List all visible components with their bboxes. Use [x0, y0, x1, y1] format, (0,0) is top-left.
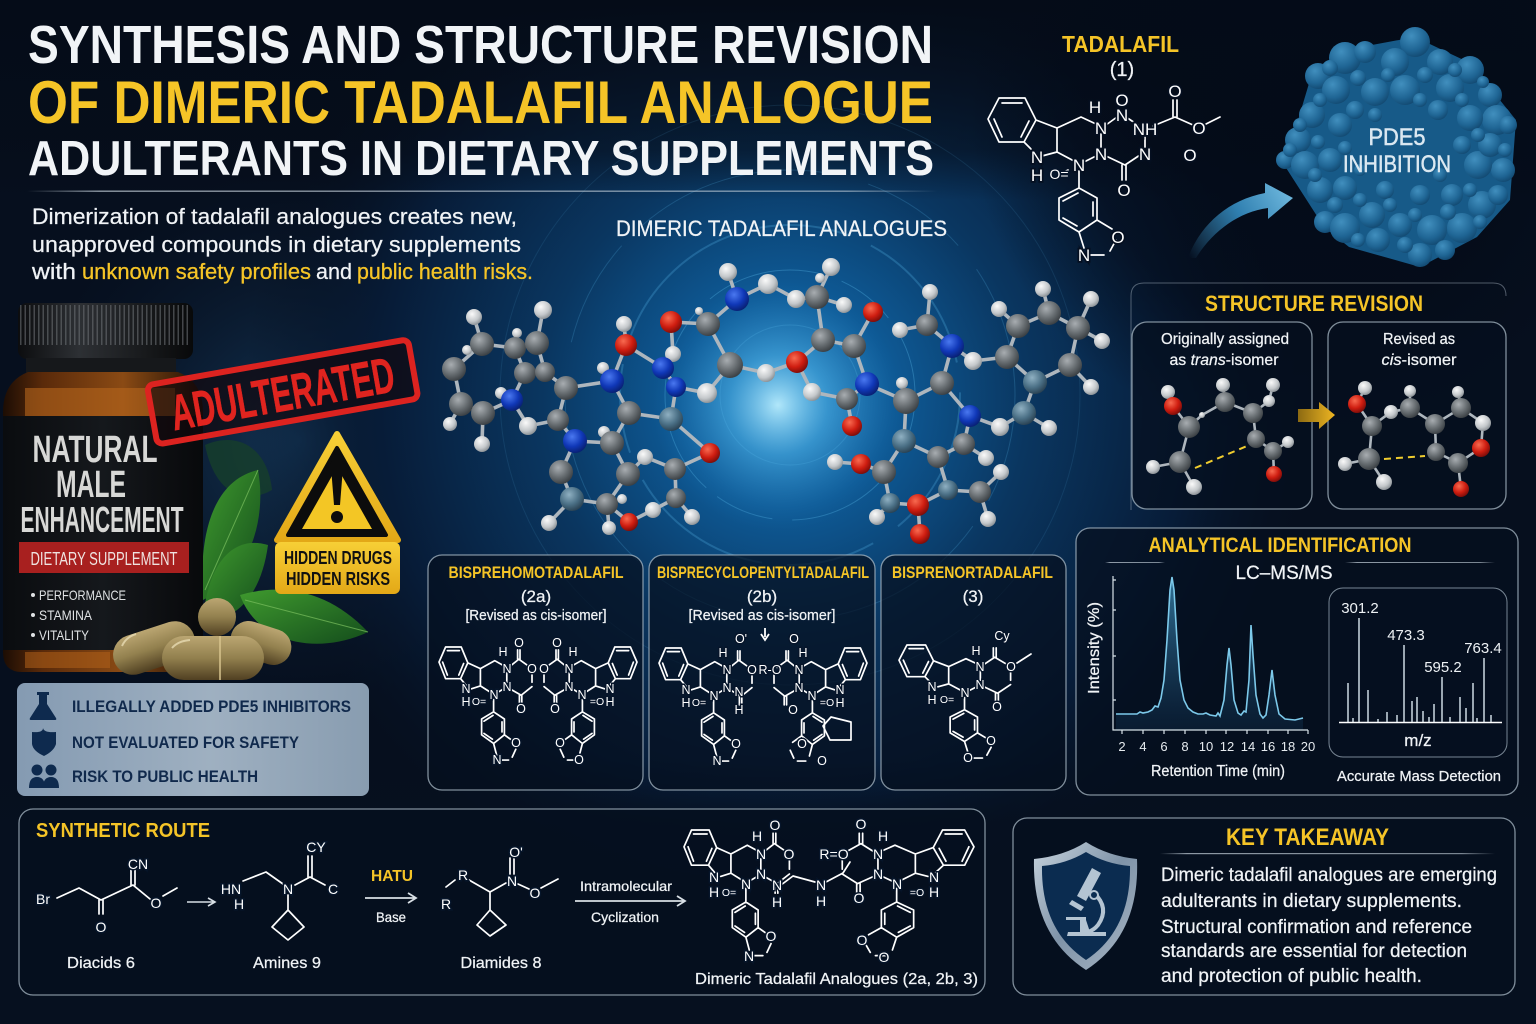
tadalafil structure: N: [1095, 119, 1107, 138]
mass spectrum: [1329, 588, 1507, 757]
structure 2a: N: [564, 680, 574, 694]
panel: 2a: [Revised as cis-isomer]: [466, 607, 606, 624]
amines 9: HN: [221, 881, 241, 897]
structure 2a: [439, 636, 637, 767]
diamides 8: R: [458, 867, 468, 883]
adulterated stamp: ADULTERATED: [166, 347, 399, 441]
arrow: intramolecular cyclization: [575, 878, 685, 925]
product structure: H: [816, 893, 826, 909]
bottle label: PERFORMANCE: [39, 587, 126, 603]
diamides 8: O': [509, 844, 523, 860]
structure 2b: N: [794, 681, 804, 695]
structure 2b: H: [681, 696, 691, 710]
panel: 2b: [649, 555, 875, 790]
arrow: trans to cis: [1298, 402, 1335, 429]
panel: 2b: [Revised as cis-isomer]: [688, 607, 836, 624]
reagents: HATU and base: Base: [376, 909, 406, 925]
panel: analytical identification: LC–MS/MS: [1236, 563, 1332, 584]
product structure: N: [756, 846, 766, 862]
PDE5 protein: [1276, 27, 1517, 267]
arrow: to PDE5: [1188, 183, 1293, 258]
tadalafil structure: O: [1168, 82, 1182, 101]
structure 2b: N: [734, 685, 744, 699]
chromatogram: Intensity (%): [1086, 602, 1103, 694]
structure 2a: O: [511, 736, 521, 750]
product structure: H: [709, 884, 719, 900]
mass spectrum: 595.2: [1424, 659, 1462, 676]
structure 2b: N: [807, 689, 817, 703]
structure 2b: H: [734, 703, 744, 717]
panel: 2b: BISPRECYCLOPENTYLTADALAFIL: [657, 563, 869, 582]
structure 2a: N: [502, 662, 512, 676]
cis-isomer box: cis-isomer: [1382, 352, 1457, 369]
bottle label: MALE: [56, 464, 126, 506]
chromatogram: 2: [1118, 739, 1126, 754]
product structure: H: [878, 828, 888, 844]
structure 2a: N: [489, 688, 499, 702]
trans-isomer box: [1132, 322, 1312, 509]
product structure: O: [784, 846, 795, 862]
product structure: N: [873, 846, 883, 862]
panel: risk list: NOT EVALUATED FOR SAFETY: [72, 733, 300, 752]
product structure: O=: [722, 887, 736, 899]
subtitle text block: unknown safety profiles: [82, 259, 311, 284]
trans-isomer box: Originally assigned: [1161, 331, 1289, 348]
amines 9: H: [234, 896, 244, 912]
structure 2b: N: [722, 663, 732, 677]
subtitle text block: public health risks.: [357, 259, 533, 284]
diacids 6: O: [96, 919, 107, 935]
takeaway text: adulterants in dietary supplements.: [1161, 891, 1462, 912]
diacids 6: O: [151, 895, 162, 911]
structure 2b: H: [798, 646, 808, 660]
mass spectrum: 301.2: [1341, 600, 1379, 617]
amines 9: [221, 839, 338, 972]
structure 2b: =O: [820, 697, 834, 709]
bottle body: [3, 372, 203, 672]
adulterated stamp: [147, 339, 418, 444]
product structure: N: [892, 876, 902, 892]
structure 2a: H: [498, 645, 508, 659]
heading: key takeaway: KEY TAKEAWAY: [1226, 824, 1389, 851]
structure 2b: N: [722, 681, 732, 695]
PDE5 protein: INHIBITION: [1343, 151, 1451, 178]
title: [28, 15, 934, 186]
structure 2b: N: [681, 683, 691, 697]
chromatogram: 6: [1160, 739, 1168, 754]
cis-isomer box: Revised as: [1383, 331, 1455, 348]
panel: 3: BISPRENORTADALAFIL: [892, 563, 1053, 582]
product structure: O: [854, 890, 865, 906]
structure 2a: O: [552, 636, 562, 650]
structure 2a: N: [502, 680, 512, 694]
structure 3: N: [960, 686, 970, 700]
chromatogram: Retention Time (min): [1151, 763, 1285, 780]
bottle label: DIETARY SUPPLEMENT: [30, 549, 178, 569]
panel: 2b: (2b): [747, 587, 777, 606]
structure 2a: O: [527, 662, 537, 676]
bottle cap: [18, 303, 193, 374]
subtitle text block: unapproved compounds in dietary supplements: [32, 232, 521, 257]
structure 2a: N: [492, 753, 502, 767]
heading: tadalafil: TADALAFIL: [1062, 31, 1179, 57]
tadalafil structure: [988, 82, 1220, 265]
structure 2b: O: [789, 632, 799, 646]
panel: 3: [881, 555, 1066, 790]
title: OF DIMERIC TADALAFIL ANALOGUE: [28, 69, 933, 136]
structure 2b: O: [817, 754, 827, 768]
panel: structure revision: [1131, 283, 1506, 510]
bottle label: NATURAL: [32, 429, 158, 471]
bottle label: [3, 416, 203, 650]
badge: hidden drugs hidden risks: HIDDEN RISKS: [286, 569, 390, 589]
structure 3: N: [975, 678, 985, 692]
arrow: down: [761, 628, 769, 640]
diacids 6: [36, 856, 177, 972]
badge: hidden drugs hidden risks: HIDDEN DRUGS: [284, 548, 392, 568]
reagents: HATU and base: [365, 868, 416, 925]
chromatogram: 16: [1261, 739, 1275, 754]
chromatogram: 12: [1220, 739, 1234, 754]
structure 3: N: [975, 660, 985, 674]
structure 2b: O': [735, 632, 747, 646]
diamides 8: N: [507, 873, 517, 889]
product structure: H: [752, 828, 762, 844]
panel: 2a: BISPREHOMOTADALAFIL: [448, 563, 624, 582]
tadalafil structure: N: [1078, 246, 1090, 265]
panel: risk list: ILLEGALLY ADDED PDE5 INHIBITORS: [72, 697, 351, 716]
structure 2a: O: [514, 636, 524, 650]
structure 2a: =O: [590, 696, 604, 708]
product structure: O: [856, 816, 867, 832]
takeaway text: standards are essential for detection: [1161, 941, 1467, 962]
subtitle text block: with: [31, 259, 76, 284]
heading: tadalafil: [1062, 31, 1179, 81]
product structure: N: [756, 866, 766, 882]
title: ADULTERANTS IN DIETARY SUPPLEMENTS: [28, 132, 934, 186]
mass spectrum: m/z: [1404, 731, 1432, 750]
panel: 3: (3): [963, 587, 983, 606]
product structure: =O: [910, 887, 924, 899]
tadalafil structure: NH: [1133, 120, 1157, 139]
panel: 2a: (2a): [521, 587, 551, 606]
bottle: [3, 303, 368, 680]
takeaway text: [1161, 865, 1497, 987]
amines 9: Amines 9: [253, 955, 321, 972]
structure 3: H: [927, 693, 937, 707]
panel: key takeaway: [1013, 818, 1515, 995]
product structure: H: [929, 884, 939, 900]
product structure: R=O: [819, 846, 849, 862]
tadalafil structure: N: [1073, 156, 1085, 175]
chromatogram: 20: [1301, 739, 1315, 754]
product structure: N: [744, 948, 754, 964]
product structure: N: [741, 876, 751, 892]
icon: people: [29, 764, 59, 788]
structure 2b: O: [797, 737, 807, 751]
product structure: N: [709, 869, 719, 885]
panel: analytical identification: [1076, 528, 1518, 795]
tadalafil structure: O: [1117, 181, 1131, 200]
leaves: [202, 440, 368, 644]
cis-isomer box: [1328, 322, 1506, 509]
diamides 8: Diamides 8: [460, 955, 542, 972]
structure 2b: O: [788, 703, 798, 717]
product structure: N: [873, 866, 883, 882]
structure 3: O: [1006, 660, 1016, 674]
takeaway text: Structural confirmation and reference: [1161, 917, 1472, 938]
chromatogram: 8: [1181, 739, 1189, 754]
structure 2a: H: [568, 645, 578, 659]
tadalafil structure: O: [1115, 91, 1129, 110]
structure 3: O=: [940, 694, 954, 706]
diamides 8: O: [530, 885, 541, 901]
badge: hidden drugs hidden risks: [275, 542, 400, 594]
mass spectrum: 473.3: [1387, 627, 1425, 644]
tadalafil structure: N: [1031, 148, 1043, 167]
structure 3: N: [927, 680, 937, 694]
icon: shield: [32, 728, 56, 756]
bottle label: STAMINA: [39, 607, 93, 623]
tadalafil structure: H: [1031, 166, 1043, 185]
amines 9: C: [328, 881, 338, 897]
product structure: O: [857, 932, 868, 948]
chromatogram: 4: [1139, 739, 1147, 754]
structure 2b: N: [709, 689, 719, 703]
diacids 6: CN: [128, 856, 148, 872]
product structure: N: [816, 877, 826, 893]
structure 2a: N: [605, 682, 615, 696]
product structure: [684, 816, 974, 965]
product structure: N: [772, 877, 782, 893]
structure 2b: R-O: [759, 663, 782, 677]
panel: risk list: RISK TO PUBLIC HEALTH: [72, 767, 258, 786]
structure 3: O: [986, 734, 996, 748]
arrow: intramolecular cyclization: Intramolecular: [580, 878, 672, 894]
structure 2a: O: [539, 662, 549, 676]
central ball-and-stick molecule: [442, 258, 1110, 544]
mass spectrum: 763.4: [1464, 640, 1502, 657]
diacids 6: Br: [36, 891, 50, 907]
title: SYNTHESIS AND STRUCTURE REVISION: [28, 15, 933, 75]
amines 9: CY: [306, 839, 326, 855]
structure 2a: O: [574, 753, 584, 767]
icon: warning triangle: [277, 434, 398, 540]
tadalafil structure: N: [1116, 106, 1128, 125]
structure 2b: N: [835, 683, 845, 697]
structure 2b: O=: [692, 697, 706, 709]
tadalafil structure: H: [1089, 98, 1101, 117]
panel: 2a: [428, 555, 643, 790]
panel: risk list: [17, 683, 369, 796]
capsules: [108, 598, 296, 680]
bottle label: ENHANCEMENT: [20, 499, 183, 540]
arrow: [187, 898, 215, 906]
takeaway text: Dimeric tadalafil analogues are emerging: [1161, 865, 1497, 886]
structure 2b: N: [794, 663, 804, 677]
structure 3: O: [992, 700, 1002, 714]
trans-isomer box: as trans-isomer: [1170, 352, 1279, 369]
structure 2a: H: [461, 695, 471, 709]
bottle label: VITALITY: [39, 627, 90, 643]
chromatogram: 10: [1199, 739, 1213, 754]
heading: dimeric tadalafil analogues: DIMERIC TADALAFIL ANALOGUES: [616, 216, 947, 241]
structure 2a: N: [564, 662, 574, 676]
structure 2b: H: [718, 646, 728, 660]
diamides 8: R: [441, 896, 451, 912]
structure 3: H: [971, 644, 981, 658]
chromatogram: 18: [1281, 739, 1295, 754]
diacids 6: Diacids 6: [67, 955, 135, 972]
heading: structure revision: STRUCTURE REVISION: [1205, 291, 1423, 316]
tadalafil structure: N: [1095, 145, 1107, 164]
panel: synthetic route: Dimeric Tadalafil Analogues (2a, 2b, 3): [695, 971, 978, 988]
tadalafil structure: O: [1183, 146, 1197, 165]
tadalafil structure: O: [1192, 119, 1206, 138]
tadalafil structure: O: [1111, 228, 1125, 247]
tadalafil structure: N: [1139, 145, 1151, 164]
panel: synthetic route: [19, 809, 985, 995]
structure 2b: N: [712, 754, 722, 768]
structure 2b: O: [731, 737, 741, 751]
arrow: intramolecular cyclization: Cyclization: [591, 909, 659, 925]
tadalafil structure: O=: [1049, 166, 1069, 182]
takeaway text: and protection of public health.: [1161, 966, 1422, 987]
structure 2a: O: [550, 702, 560, 716]
structure 2b: O: [747, 663, 757, 677]
structure 2a: O: [555, 736, 565, 750]
subtitle text block: and: [316, 259, 352, 284]
structure 2b: [659, 632, 867, 768]
structure 2a: O: [516, 702, 526, 716]
structure 2a: N: [577, 688, 587, 702]
panel: analytical identification: Accurate Mass Detection: [1337, 768, 1501, 785]
icon: shield with microscope: [1034, 842, 1137, 970]
PDE5 protein: PDE5: [1368, 124, 1426, 151]
amines 9: N: [283, 881, 293, 897]
chromatogram: 14: [1241, 739, 1255, 754]
subtitle text block: [31, 204, 533, 284]
structure 3: O: [963, 751, 973, 765]
structure 2a: O=: [472, 696, 486, 708]
chromatogram: [1086, 576, 1315, 780]
icon: flask: [30, 692, 56, 720]
heading: tadalafil: (1): [1110, 59, 1134, 81]
structure 2b: H: [835, 696, 845, 710]
reagents: HATU and base: HATU: [371, 868, 413, 885]
structure 2a: N: [461, 682, 471, 696]
heading: analytical identification: ANALYTICAL IDENTIFICATION: [1148, 534, 1412, 557]
product structure: N: [929, 869, 939, 885]
structure 3: [899, 629, 1031, 765]
subtitle text block: Dimerization of tadalafil analogues creates new,: [32, 204, 517, 229]
product structure: O: [766, 928, 777, 944]
heading: synthetic route: SYNTHETIC ROUTE: [36, 820, 210, 842]
structure 3: Cy: [994, 629, 1010, 643]
diamides 8: [441, 844, 558, 972]
product structure: O: [770, 817, 781, 833]
structure 2a: H: [605, 695, 615, 709]
product structure: O: [879, 949, 890, 965]
product structure: H: [772, 894, 782, 910]
